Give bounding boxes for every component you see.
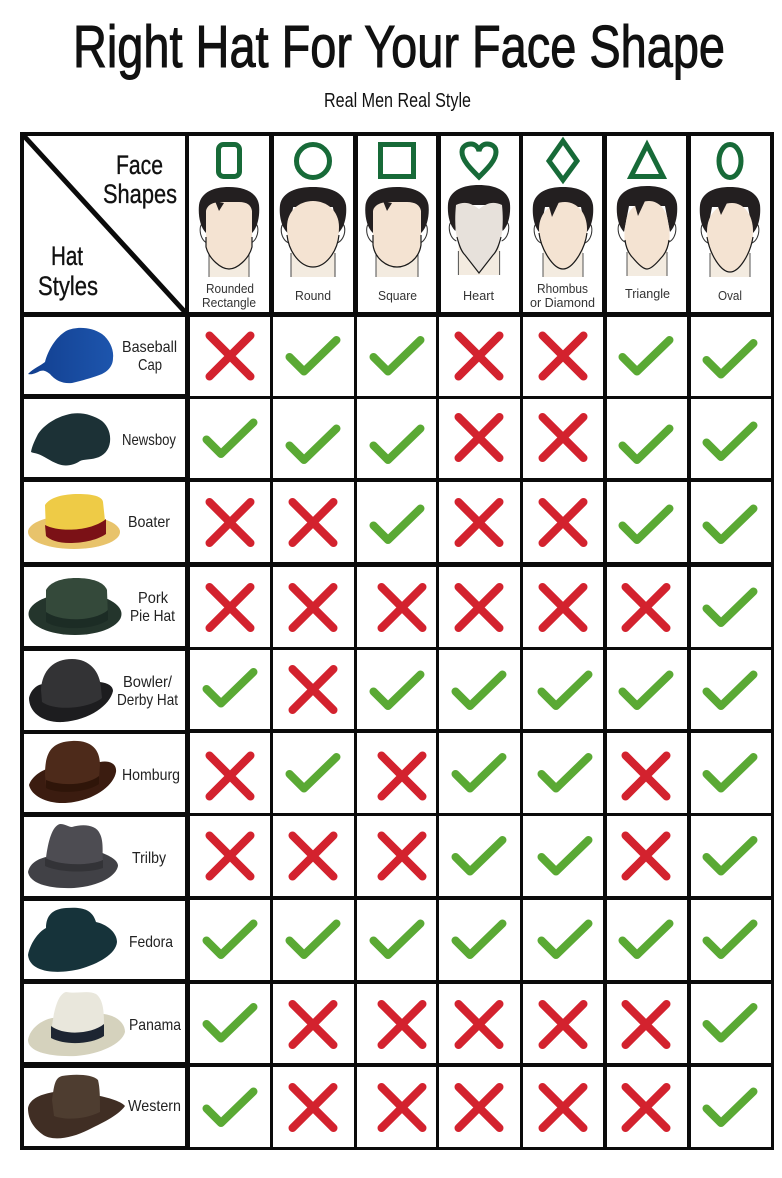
column: rhombus or diamond: Rhombus	[537, 281, 588, 296]
row: Boater	[24, 482, 771, 562]
row: Bowler/Derby Hat	[24, 650, 771, 730]
label: newsboy: Newsboy	[122, 432, 176, 449]
label: panama: Panama	[129, 1017, 181, 1034]
label: bowler/derby hat	[117, 674, 178, 709]
label: bowler/derby hat: Bowler/	[123, 674, 173, 691]
marks	[206, 1087, 754, 1128]
label: baseball cap: Baseball	[122, 339, 177, 356]
hat: newsboy	[31, 413, 110, 465]
hat: baseball cap	[28, 328, 113, 383]
label: fedora: Fedora	[129, 934, 173, 951]
column: rhombus or diamond	[523, 136, 602, 312]
hat: trilby	[28, 824, 118, 888]
label: pork pie hat: Pie Hat	[130, 608, 175, 625]
row: Newsboy	[24, 399, 771, 478]
column: square: Square	[378, 288, 417, 303]
column: square	[358, 136, 436, 312]
column: rounded rectangle	[189, 136, 269, 312]
corner cell: axis labels: Styles	[38, 271, 98, 301]
corner cell: axis labels: Hat	[51, 241, 83, 271]
hat: homburg	[29, 741, 116, 803]
marks	[206, 1004, 754, 1045]
label: trilby: Trilby	[132, 850, 166, 867]
header row	[24, 136, 770, 312]
marks	[210, 587, 754, 628]
label: boater: Boater	[128, 514, 171, 531]
column: triangle	[607, 136, 686, 312]
hat: fedora	[28, 908, 117, 972]
marks	[210, 336, 754, 376]
row: Trilby	[24, 816, 771, 896]
row: Pork Pie Hat	[24, 567, 771, 647]
column: oval: Oval	[718, 288, 742, 303]
label: baseball cap: Cap	[138, 357, 162, 374]
hat: pork pie	[28, 578, 122, 635]
row: Homburg	[24, 733, 771, 813]
hat: panama	[28, 992, 125, 1056]
marks	[210, 502, 754, 543]
column: rhombus or diamond: or Diamond	[530, 295, 595, 310]
hat: bowler	[29, 659, 113, 722]
marks	[210, 836, 754, 876]
corner cell: axis labels: Shapes	[103, 179, 177, 209]
label: pork pie hat: Pork	[138, 590, 169, 607]
row: Fedora	[24, 900, 771, 980]
corner cell: axis labels: Face	[116, 150, 163, 180]
label: bowler/derby hat: Derby Hat	[117, 692, 178, 709]
column: oval	[691, 136, 770, 312]
column: rounded rectangle: Rectangle	[202, 295, 256, 310]
marks	[206, 924, 754, 955]
marks	[206, 669, 754, 710]
column: round: Round	[295, 288, 331, 303]
hat: boater	[28, 494, 120, 549]
column: triangle: Triangle	[625, 286, 670, 301]
column: heart: Heart	[463, 288, 494, 303]
row: Panama	[24, 984, 771, 1063]
marks	[210, 756, 754, 796]
subtitle: Real Men Real Style	[324, 90, 471, 112]
row: Baseball Cap	[24, 317, 771, 396]
label: western: Western	[128, 1098, 181, 1115]
row: Western	[24, 1067, 771, 1147]
column: rounded rectangle: Rounded	[206, 281, 254, 296]
label: pork pie hat	[130, 590, 175, 625]
column: heart	[441, 136, 519, 312]
marks	[206, 417, 754, 460]
label: baseball cap	[122, 339, 177, 374]
label: homburg: Homburg	[122, 767, 180, 784]
corner cell: axis labels	[24, 136, 185, 312]
hat: western	[28, 1075, 125, 1138]
column: round	[274, 136, 353, 312]
